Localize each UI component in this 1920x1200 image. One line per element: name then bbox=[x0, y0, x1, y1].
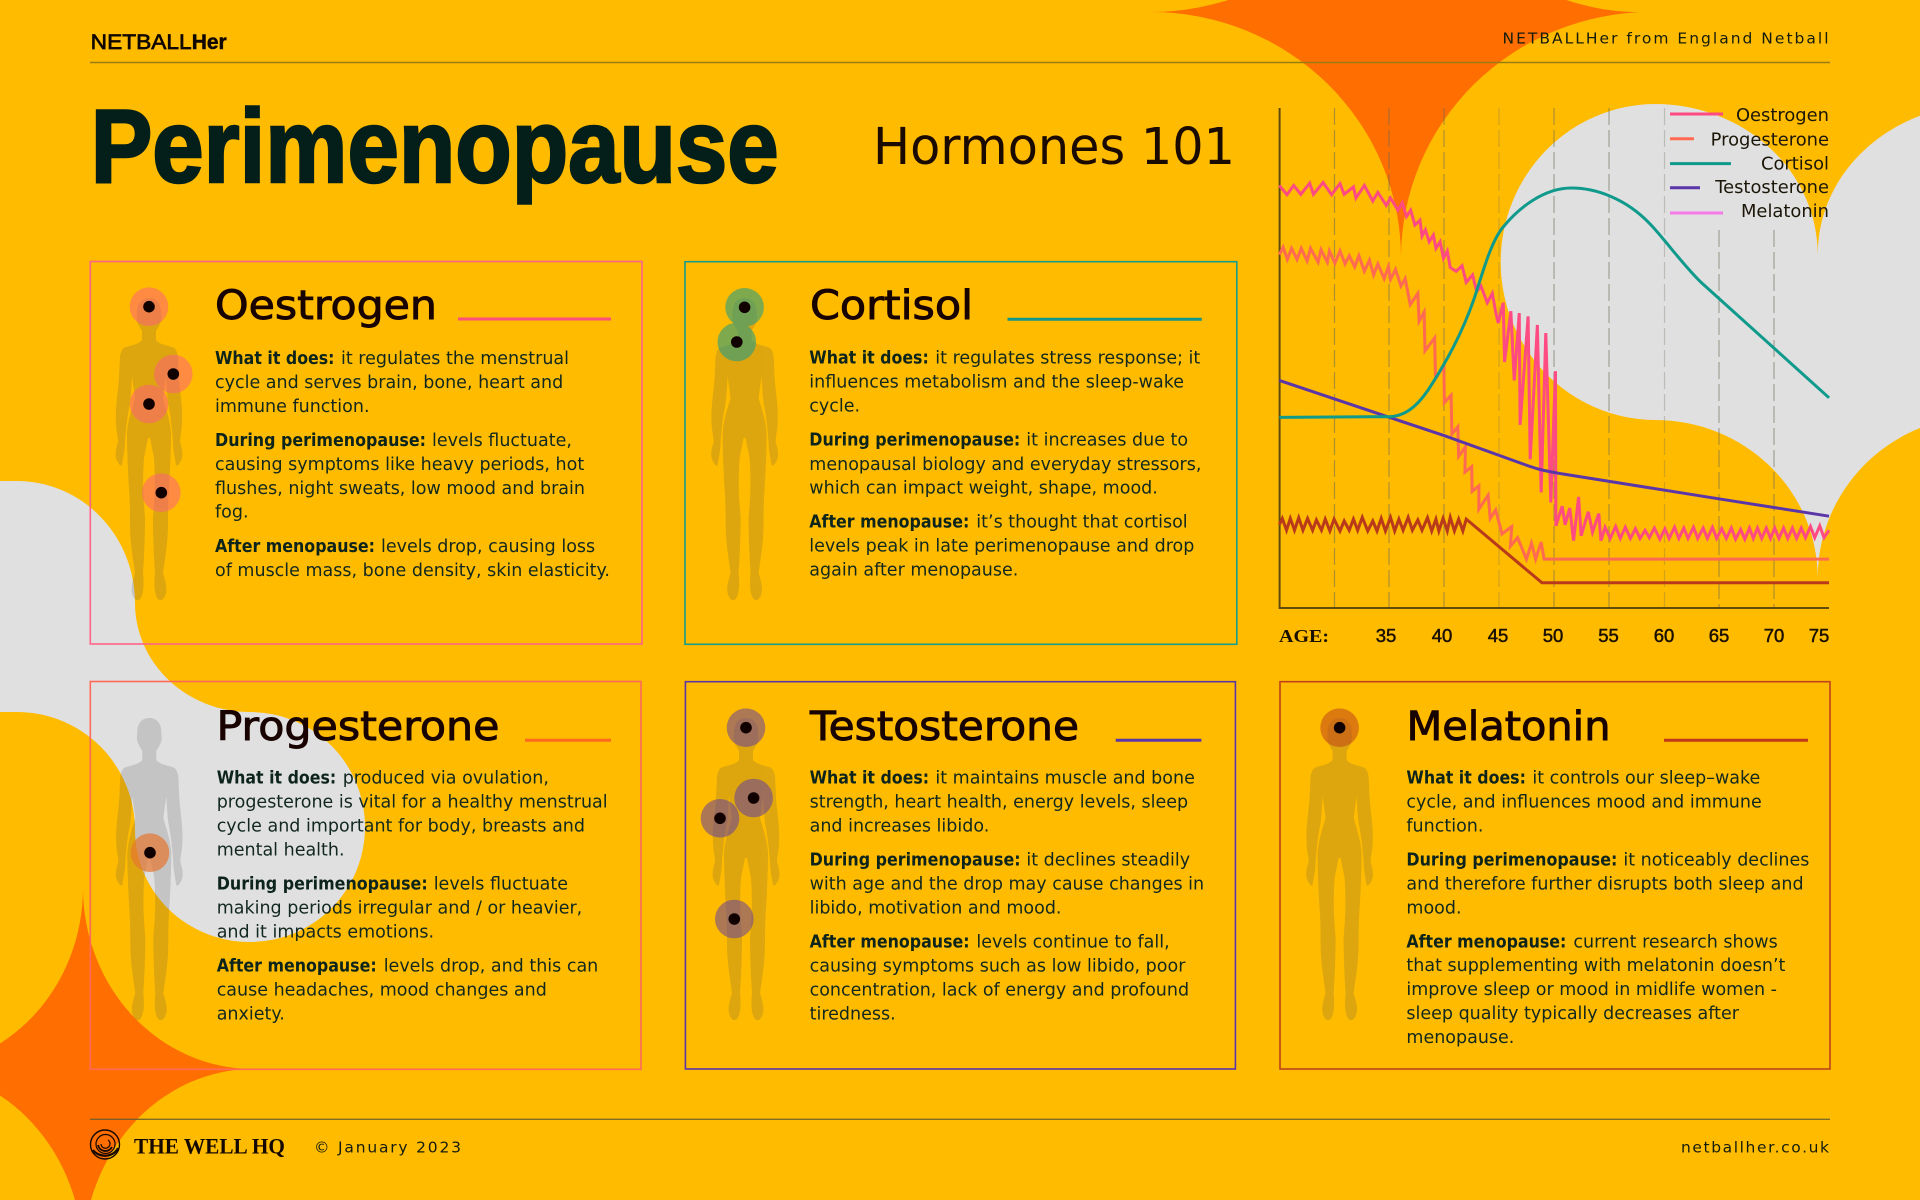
text: progesterone during perimenopause: and it impacts emotions. bbox=[217, 922, 434, 942]
header credit: NETBALLHer from England Netball bbox=[1502, 30, 1828, 48]
text: testosterone after menopause bbox=[810, 933, 1189, 1024]
chart legend: Melatonin bbox=[1741, 201, 1829, 222]
text: oestrogen during perimenopause bbox=[215, 431, 585, 522]
chart age axis labels: 75 bbox=[1809, 625, 1829, 646]
text: testosterone during perimenopause: it declines steadily bbox=[1026, 851, 1190, 871]
date: © January 2023 bbox=[314, 1139, 461, 1157]
icon: body figure with testosterone sites bbox=[701, 708, 779, 1020]
chart age axis labels: 50 bbox=[1543, 625, 1563, 646]
line: oestrogen bbox=[1279, 182, 1829, 541]
text: what testosterone does: and increases libido. bbox=[810, 817, 989, 837]
text: what melatonin does bbox=[1406, 768, 1762, 836]
text: testosterone during perimenopause: libido, motivation and mood. bbox=[810, 898, 1062, 918]
panel: testosterone bbox=[685, 682, 1235, 1069]
text: what cortisol does: What it does: bbox=[809, 348, 929, 368]
icon: body figure with cortisol sites bbox=[711, 288, 778, 600]
footer bbox=[90, 1119, 1830, 1159]
text: progesterone after menopause: cause headaches, mood changes and bbox=[217, 981, 547, 1001]
text: what progesterone does: cycle and important for body, breasts and bbox=[217, 816, 585, 836]
text: melatonin during perimenopause: During perimenopause: bbox=[1406, 850, 1617, 870]
text: what progesterone does: produced via ovulation, bbox=[343, 768, 549, 788]
chart age axis labels: 35 bbox=[1376, 625, 1396, 646]
text: oestrogen during perimenopause: During perimenopause: bbox=[215, 431, 426, 451]
text: melatonin after menopause: improve sleep or mood in midlife women - bbox=[1406, 980, 1777, 1000]
text: progesterone after menopause: After menopause: bbox=[217, 957, 377, 977]
text: melatonin during perimenopause: and therefore further disrupts both sleep and bbox=[1406, 874, 1804, 894]
text: what melatonin does: cycle, and influences mood and immune bbox=[1406, 792, 1762, 812]
text: cortisol after menopause: levels peak in late perimenopause and drop bbox=[809, 537, 1194, 557]
text: what cortisol does bbox=[809, 348, 1200, 417]
text: cortisol after menopause: After menopause: bbox=[809, 513, 969, 533]
text: progesterone after menopause bbox=[217, 957, 598, 1024]
background: grey blob right bbox=[1501, 104, 1920, 578]
text: cortisol during perimenopause: During perimenopause: bbox=[809, 431, 1020, 451]
chart age axis labels: 55 bbox=[1598, 625, 1619, 646]
chart legend bbox=[1670, 105, 1829, 222]
text: melatonin after menopause: sleep quality typically decreases after bbox=[1406, 1004, 1740, 1024]
line: melatonin bbox=[1279, 517, 1829, 583]
text: oestrogen during perimenopause: flushes, night sweats, low mood and brain bbox=[215, 479, 585, 499]
text: progesterone during perimenopause: making periods irregular and / or heavier, bbox=[217, 898, 582, 918]
panel: cortisol bbox=[685, 262, 1237, 644]
text: oestrogen during perimenopause: causing symptoms like heavy periods, hot bbox=[215, 455, 584, 475]
text: progesterone during perimenopause bbox=[217, 874, 582, 942]
text: what melatonin does: function. bbox=[1406, 816, 1483, 836]
logo: NETBALLHer bbox=[91, 30, 227, 54]
panel: progesterone bbox=[90, 682, 641, 1069]
text: cortisol after menopause: it’s thought that cortisol bbox=[976, 513, 1188, 533]
text: what oestrogen does: cycle and serves brain, bone, heart and bbox=[215, 373, 563, 393]
text: what melatonin does: it controls our sleep–wake bbox=[1532, 768, 1760, 788]
chart age axis labels: 65 bbox=[1709, 625, 1729, 646]
panel: oestrogen bbox=[90, 262, 642, 644]
heading: progesterone: Progesterone bbox=[216, 704, 500, 750]
text: melatonin after menopause bbox=[1406, 932, 1786, 1048]
header bbox=[90, 30, 1830, 62]
icon: body figure with melatonin site bbox=[1306, 708, 1373, 1020]
chart age axis labels: AGE: bbox=[1279, 626, 1329, 646]
chart age axis labels: 45 bbox=[1488, 625, 1508, 646]
text: what progesterone does bbox=[217, 768, 608, 860]
icon: The Well HQ spiral bbox=[90, 1130, 120, 1159]
text: oestrogen during perimenopause: levels fluctuate, bbox=[432, 431, 572, 451]
title: Perimenopause bbox=[91, 89, 779, 205]
heading: melatonin: Melatonin bbox=[1406, 704, 1610, 750]
text: what cortisol does: influences metabolism and the sleep-wake bbox=[809, 373, 1184, 393]
text: melatonin during perimenopause bbox=[1406, 850, 1809, 918]
text: melatonin after menopause: current research shows bbox=[1573, 932, 1778, 952]
line: cortisol bbox=[1279, 188, 1829, 417]
chart age axis labels bbox=[1279, 625, 1829, 646]
text: cortisol during perimenopause bbox=[809, 431, 1201, 498]
brand: The Well HQ: THE WELL HQ bbox=[134, 1133, 285, 1158]
text: cortisol during perimenopause: which can impact weight, shape, mood. bbox=[809, 478, 1158, 498]
line: progesterone bbox=[1279, 247, 1829, 559]
website: netballher.co.uk bbox=[1681, 1139, 1829, 1157]
text: testosterone during perimenopause bbox=[810, 851, 1204, 918]
text: oestrogen after menopause: of muscle mass, bone density, skin elasticity. bbox=[215, 561, 610, 581]
chart legend: Oestrogen bbox=[1736, 105, 1829, 126]
text: testosterone after menopause: causing symptoms such as low libido, poor bbox=[810, 957, 1186, 977]
chart age axis labels: 40 bbox=[1432, 625, 1452, 646]
chart legend: Cortisol bbox=[1761, 154, 1829, 174]
background: orange star top bbox=[1151, 0, 1651, 258]
text: cortisol during perimenopause: menopausal biology and everyday stressors, bbox=[809, 455, 1201, 475]
background: orange star bottom left bbox=[0, 888, 253, 1200]
text: cortisol after menopause bbox=[809, 513, 1194, 581]
text: progesterone after menopause: anxiety. bbox=[217, 1004, 285, 1024]
text: testosterone after menopause: levels continue to fall, bbox=[976, 933, 1170, 953]
text: testosterone after menopause: After menopause: bbox=[810, 933, 970, 953]
text: what testosterone does bbox=[810, 768, 1195, 837]
text: melatonin after menopause: menopause. bbox=[1406, 1028, 1514, 1048]
text: oestrogen after menopause bbox=[215, 537, 610, 581]
text: what cortisol does: it regulates stress response; it bbox=[935, 348, 1200, 368]
text: melatonin during perimenopause: it noticeably declines bbox=[1623, 850, 1809, 870]
text: testosterone after menopause: tiredness. bbox=[810, 1004, 896, 1024]
text: what testosterone does: strength, heart health, energy levels, sleep bbox=[810, 793, 1188, 813]
text: what melatonin does: What it does: bbox=[1406, 768, 1526, 788]
text: what progesterone does: progesterone is vital for a healthy menstrual bbox=[217, 792, 608, 812]
chart age axis labels: 70 bbox=[1764, 625, 1784, 646]
chart lines bbox=[1279, 182, 1829, 583]
text: what progesterone does: mental health. bbox=[217, 840, 345, 860]
text: progesterone during perimenopause: During perimenopause: bbox=[217, 874, 428, 894]
icon: body figure with oestrogen sites bbox=[116, 287, 193, 600]
text: what oestrogen does: immune function. bbox=[215, 397, 370, 417]
panel: melatonin bbox=[1280, 682, 1830, 1069]
chart legend: Testosterone bbox=[1714, 177, 1829, 198]
text: melatonin after menopause: that supplementing with melatonin doesn’t bbox=[1406, 956, 1786, 976]
text: what testosterone does: What it does: bbox=[810, 768, 929, 788]
text: melatonin after menopause: After menopause: bbox=[1406, 932, 1566, 952]
text: oestrogen after menopause: After menopause: bbox=[215, 537, 375, 557]
text: oestrogen during perimenopause: fog. bbox=[215, 502, 249, 522]
text: progesterone during perimenopause: levels fluctuate bbox=[434, 874, 568, 894]
text: cortisol during perimenopause: it increases due to bbox=[1026, 431, 1188, 451]
subtitle: Hormones 101 bbox=[873, 118, 1235, 177]
text: what oestrogen does: What it does: bbox=[215, 349, 334, 369]
chart: hormone levels by age bbox=[1279, 105, 1829, 646]
text: what oestrogen does: it regulates the menstrual bbox=[341, 349, 569, 369]
text: testosterone during perimenopause: with age and the drop may cause changes in bbox=[810, 874, 1204, 894]
logo: NETBALLHer: NETBALL bbox=[91, 30, 192, 54]
chart age axis labels: 60 bbox=[1654, 625, 1674, 646]
text: melatonin during perimenopause: mood. bbox=[1406, 898, 1462, 918]
text: testosterone after menopause: concentration, lack of energy and profound bbox=[810, 981, 1189, 1001]
text: what cortisol does: cycle. bbox=[809, 397, 860, 417]
text: what progesterone does: What it does: bbox=[217, 768, 336, 788]
line: testosterone bbox=[1279, 380, 1829, 516]
logo: NETBALLHer: Her bbox=[192, 30, 227, 54]
text: cortisol after menopause: again after menopause. bbox=[809, 561, 1018, 581]
chart axes bbox=[1280, 108, 1829, 608]
heading: cortisol: Cortisol bbox=[810, 283, 973, 329]
text: what oestrogen does bbox=[215, 349, 569, 417]
text: progesterone after menopause: levels drop, and this can bbox=[384, 957, 598, 977]
text: testosterone during perimenopause: During perimenopause: bbox=[810, 851, 1021, 871]
text: what testosterone does: it maintains muscle and bone bbox=[935, 768, 1195, 788]
chart legend: Progesterone bbox=[1711, 129, 1829, 150]
background: grey blob left bbox=[0, 481, 365, 942]
heading: testosterone: Testosterone bbox=[809, 704, 1079, 750]
heading: oestrogen: Oestrogen bbox=[215, 283, 437, 329]
icon: body figure with progesterone site bbox=[116, 718, 183, 1020]
text: oestrogen after menopause: levels drop, causing loss bbox=[381, 537, 595, 557]
